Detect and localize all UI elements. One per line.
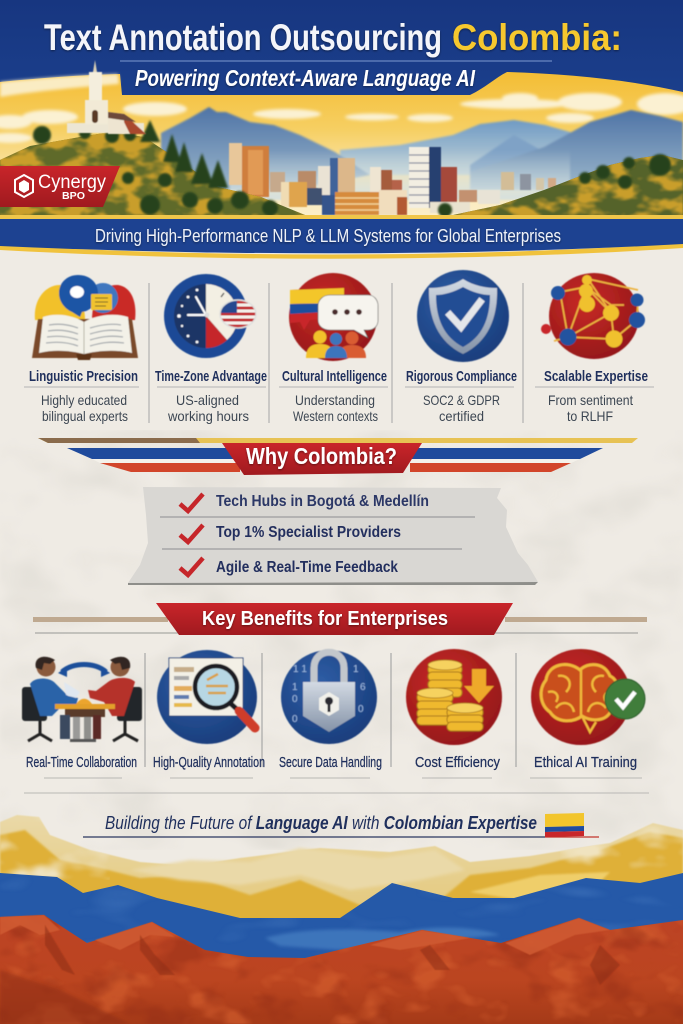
labels: capability descriptions: to RLHF [567,408,613,424]
footer mountain landscape [0,810,683,1024]
labels: capability descriptions: Western contexts [293,408,378,424]
logo badge: Cynergy BPO: Cynergy [38,172,106,193]
labels: benefits: Real-Time Collaboration [26,755,137,771]
right hill [438,150,683,217]
heading: Why Colombia?: Why Colombia? [246,443,397,469]
label underlines [24,778,649,793]
dividers [145,653,516,767]
logo badge: Cynergy BPO [0,166,120,207]
mountains [161,107,683,200]
tagline ribbon: Driving High-Performance NLP & LLM Systems for Global Enterprises [95,225,561,246]
labels: benefits [26,755,637,771]
heading: Key Benefits for Enterprises [33,603,647,635]
header photo banner [0,0,683,217]
dividers [149,283,523,423]
icon: magnifier over annotated screen [157,650,257,744]
icon: Colombian flag [545,813,584,837]
labels: capability descriptions: working hours [167,408,249,424]
check item 1: Tech Hubs in Bogotá & Medellín [216,493,429,510]
check item 3: Agile & Real-Time Feedback [216,559,398,576]
icon: scalable network [541,273,645,359]
labels: capability descriptions: From sentiment [548,392,633,408]
labels: capability titles: Time-Zone Advantage [155,368,267,385]
closing tagline: Building the Future of Language AI with Colombian Expertise [105,812,537,833]
church on the hill [67,60,146,134]
labels: benefits: Cost Efficiency [415,755,501,771]
icon: clock with US flag [164,274,259,358]
main title: Colombia: [452,17,622,58]
labels: capability titles: Scalable Expertise [544,368,648,385]
yellow range [0,814,683,918]
red range [0,910,683,1024]
blue range [0,873,683,958]
icon: secure data padlock: 0 [292,714,298,725]
icon: secure data padlock: 1 1 [293,664,307,675]
tagline ribbon [0,215,683,262]
city skyline [229,143,556,215]
label underlines [24,386,654,388]
labels: capability descriptions: US-aligned [176,392,239,408]
panel: benefits row [22,649,649,793]
icon: secure data padlock: 0 [292,694,298,705]
labels: capability descriptions: bilingual experts [42,408,128,424]
icon: secure data padlock: 0 [358,704,364,715]
labels: capability titles: Linguistic Precision [29,368,138,385]
labels: capability titles [29,368,648,385]
panel: capabilities row [24,270,654,424]
labels: capability descriptions: certified [439,408,484,424]
logo badge: Cynergy BPO: BPO [62,191,85,202]
labels: benefits: High-Quality Annotation [153,755,265,771]
icon: real-time collaboration meeting [22,657,142,742]
labels: benefits: Ethical AI Training [534,755,637,771]
icon: open book with speech bubbles [32,275,138,360]
icon: flag, speech bubble and people [289,273,378,361]
clouds [0,74,683,143]
heading: Why Colombia? [38,438,638,475]
labels: capability titles: Rigorous Compliance [406,368,517,385]
icon: ethical AI brain [531,649,645,745]
labels: capability descriptions: Highly educated [41,392,127,408]
icon: secure data padlock: 6 [360,682,366,693]
labels: capability descriptions: Understanding [295,392,375,408]
main title: Text Annotation Outsourcing [44,17,442,58]
icon: compliance shield [417,270,509,362]
panel: why colombia checklist [128,487,538,585]
labels: capability descriptions [41,392,633,424]
icon: secure data padlock: 1 [353,664,359,675]
icon: secure data padlock [281,650,377,744]
labels: capability descriptions: SOC2 & GDPR [423,392,500,408]
icon: gold coins with down arrow [406,649,502,745]
labels: capability titles: Cultural Intelligence [282,368,387,385]
subtitle: Powering Context-Aware Language AI [135,65,475,91]
icon: secure data padlock: 1 [292,682,298,693]
heading: Key Benefits for Enterprises: Key Benefits for Enterprises [202,608,448,630]
left hill [0,120,310,216]
sky [0,72,683,215]
check item 2: Top 1% Specialist Providers [216,524,401,541]
labels: benefits: Secure Data Handling [279,755,382,771]
